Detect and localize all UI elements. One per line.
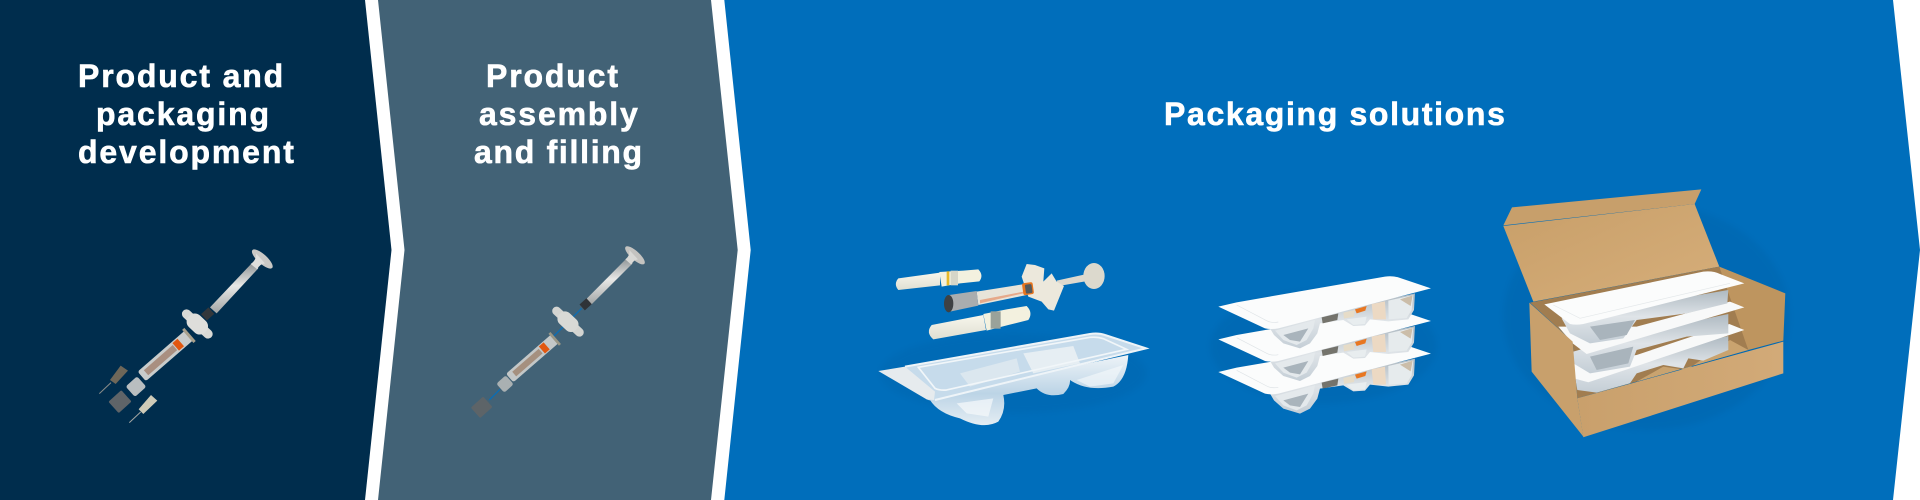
box left wall bbox=[1529, 303, 1583, 437]
panel: packaging solutions bbox=[724, 0, 1920, 500]
icon: syringe components above open tray bbox=[878, 263, 1147, 425]
icon: open cardboard box with trays bbox=[1503, 189, 1790, 437]
top tray bbox=[1218, 276, 1431, 348]
plunger rod and head bbox=[201, 247, 275, 321]
dark needle shield bbox=[108, 390, 132, 413]
heading: product assembly and filling: and filling bbox=[474, 134, 644, 170]
middle tray in box bbox=[1558, 302, 1744, 373]
heading: product and packaging development: packaging bbox=[96, 96, 271, 132]
box front wall bbox=[1577, 342, 1783, 437]
filled syringe bbox=[944, 263, 1105, 312]
middle tray bbox=[1218, 309, 1431, 381]
barrel with orange band bbox=[504, 332, 561, 384]
box interior floor bbox=[1530, 267, 1748, 398]
light needle bbox=[129, 395, 157, 423]
barrel with orange band bbox=[136, 328, 196, 383]
heading: product assembly and filling bbox=[474, 58, 644, 170]
heading: product and packaging development: development bbox=[78, 134, 296, 170]
bottom tray in box bbox=[1574, 324, 1744, 393]
assembly lines bbox=[489, 308, 582, 400]
heading: packaging solutions: Packaging solutions bbox=[1164, 96, 1507, 132]
box right inner wall bbox=[1719, 267, 1785, 350]
heading: product and packaging development bbox=[78, 58, 296, 170]
dark needle bbox=[99, 366, 128, 394]
icon: exploded syringe with needles bbox=[99, 247, 275, 423]
heading: product and packaging development: Product and bbox=[78, 58, 285, 94]
panel: product and packaging development bbox=[0, 0, 392, 500]
needle cap one bbox=[896, 269, 981, 290]
plunger rod and head bbox=[580, 244, 647, 310]
finger flange bbox=[178, 305, 217, 343]
box trays bbox=[1544, 271, 1744, 393]
finger flange bbox=[548, 303, 588, 341]
bottom tray bbox=[1218, 342, 1431, 414]
syringe tip cap bbox=[496, 375, 514, 393]
panel: product assembly and filling bbox=[378, 0, 738, 500]
heading: product assembly and filling: assembly bbox=[479, 96, 640, 132]
top tray in box bbox=[1544, 271, 1744, 343]
icon: exploded assembly syringe bbox=[471, 244, 647, 418]
needle shield bbox=[471, 397, 493, 418]
box lid inside bbox=[1503, 204, 1719, 302]
icon: three stacked sealed trays bbox=[1210, 276, 1437, 414]
open clear tray bbox=[878, 334, 1146, 425]
heading: product assembly and filling: Product bbox=[486, 58, 620, 94]
box lid flap bbox=[1503, 189, 1701, 225]
syringe tip cap bbox=[126, 376, 146, 397]
needle cap two bbox=[929, 306, 1030, 339]
